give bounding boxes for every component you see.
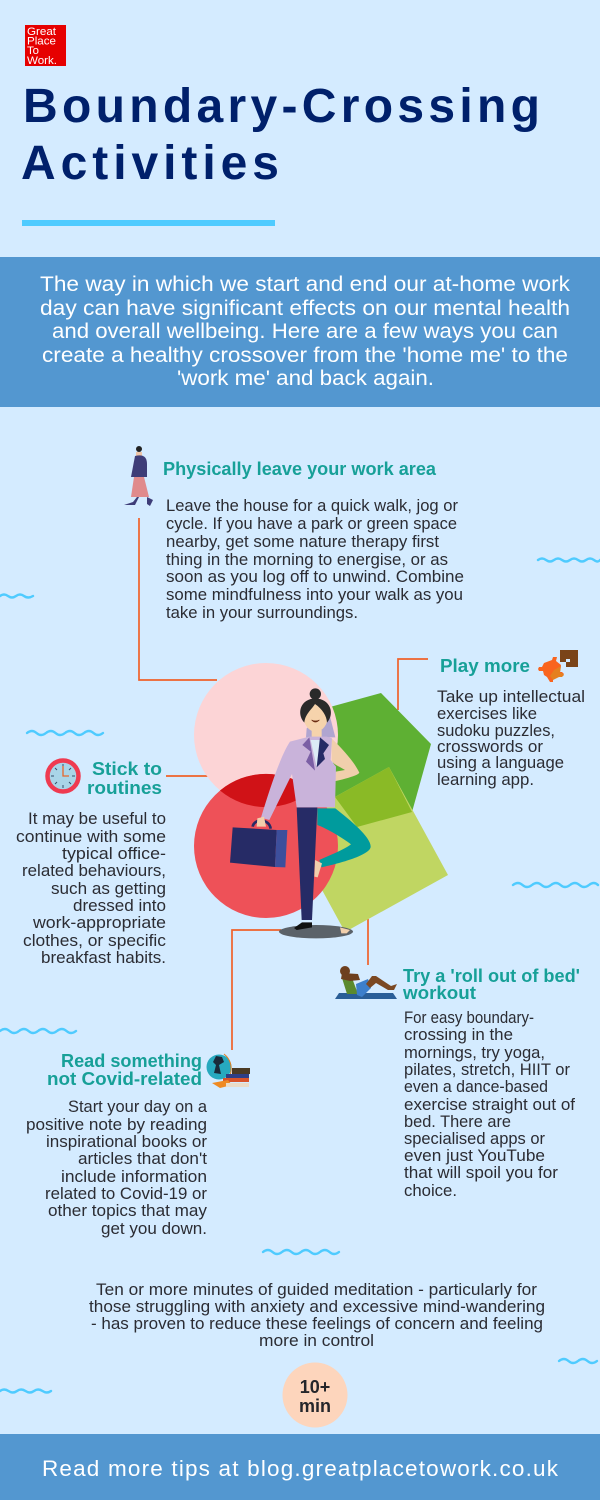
body text [26,1097,208,1238]
body text: some mindfulness into your walk as you [166,585,463,604]
panel: read something not covid-related: not Covid-related [47,1069,202,1089]
meditation text: those struggling with anxiety and excessive mind-wandering [89,1297,545,1316]
body text: articles that don't [78,1149,207,1168]
meditation text [89,1280,545,1350]
body text: It may be useful to [28,809,166,828]
body text: even a dance-based [404,1077,548,1096]
body text: choice. [404,1181,457,1200]
meditation text: Ten or more minutes of guided meditation - particularly for [96,1280,537,1299]
body text: specialised apps or [404,1129,545,1148]
10+ min badge [282,1362,348,1428]
heading: Stick to [92,759,162,779]
central illustration [194,663,448,938]
body text: breakfast habits. [41,948,166,967]
body text: For easy boundary- [404,1008,534,1027]
body text: typical office- [62,844,166,863]
panel: stick to routines [16,759,167,967]
meditation text: more in control [259,1331,374,1350]
panel: stick to routines: routines [87,778,162,798]
body text: include information [61,1167,207,1186]
body text: that will spoil you for [404,1163,558,1182]
body text: work-appropriate [32,913,166,932]
icon: person doing sit-up [335,966,397,999]
title: Boundary-Crossing [23,80,540,133]
body text: sudoku puzzles, [437,721,555,740]
body text [437,687,585,789]
heading: Try a 'roll out of bed' [403,966,580,986]
body text: bed. There are [404,1112,511,1131]
body text: take in your surroundings. [166,603,358,622]
panel: play more [437,650,585,789]
body text: Start your day on a [68,1097,208,1116]
body text: related to Covid-19 or [45,1184,207,1203]
body text: using a language [437,753,564,772]
10+ min badge: 10+ [300,1377,330,1397]
connector lines [139,518,428,1050]
green pentagon [330,693,431,812]
body text: related behaviours, [22,861,166,880]
red overlap [220,774,312,807]
body text: clothes, or specific [23,931,167,950]
body text: continue with some [16,827,166,846]
logo: Place [27,36,56,48]
intro band: create a healthy crossover from the 'home me' to the [42,343,568,367]
footer band [0,1434,600,1500]
title: Activities [21,137,279,190]
woman figure [230,688,371,938]
pink circle [194,663,338,807]
body text: exercise straight out of [404,1095,575,1114]
overlap of green shapes [335,767,412,827]
intro band: 'work me' and back again. [177,366,434,390]
body text: get you down. [101,1219,207,1238]
intro band: The way in which we start and end our at-home work [40,272,570,296]
intro band [0,257,600,407]
icon: globe and books [206,1054,250,1088]
body text: even just YouTube [404,1146,545,1165]
panel: roll out of bed workout: workout [402,983,476,1003]
red circle [194,774,338,918]
body text: Take up intellectual [437,687,585,706]
panel: physically leave your work area [124,446,464,622]
body text: pilates, stretch, HIIT or [404,1060,570,1079]
body text: nearby, get some nature therapy first [166,532,439,551]
body text [404,1008,575,1200]
logo: To [27,45,39,57]
body text: crossing in the [404,1025,513,1044]
light green square [286,767,448,932]
meditation text: - has proven to reduce these feelings of concern and feeling [91,1314,543,1333]
body text: dressed into [73,896,166,915]
body text: exercises like [437,704,537,723]
icon: clock [48,760,78,792]
body text: mornings, try yoga, [404,1043,545,1062]
footer band: Read more tips at blog.greatplacetowork.co.uk [42,1456,559,1481]
body text: positive note by reading [26,1115,207,1134]
heading: Play more [440,656,530,676]
icon: puzzle pieces [538,650,578,682]
body text: cycle. If you have a park or green space [166,514,457,533]
body text: Leave the house for a quick walk, jog or [166,496,458,515]
heading: Read something [61,1051,202,1071]
wave decorations [0,558,600,1392]
body text: learning app. [437,770,534,789]
body text: soon as you log off to unwind. Combine [166,567,464,586]
body text: inspirational books or [46,1132,207,1151]
body text [166,496,464,622]
title [21,80,540,190]
title underline [22,220,275,226]
panel: roll out of bed workout [335,966,580,1200]
panel: read something not covid-related [26,1051,250,1238]
logo: Great [27,26,56,38]
10+ min badge: min [299,1396,331,1416]
intro band: day can have significant effects on our mental health [40,296,570,320]
heading: Physically leave your work area [163,459,437,479]
body text [16,809,167,967]
body text: crosswords or [437,737,543,756]
body text: such as getting [51,879,166,898]
intro band: and overall wellbeing. Here are a few ways you can [52,319,558,343]
body text: thing in the morning to energise, or as [166,550,448,569]
body text: other topics that may [48,1201,207,1220]
icon: walking woman [124,446,153,506]
logo [25,25,66,67]
logo: Work. [27,55,57,67]
